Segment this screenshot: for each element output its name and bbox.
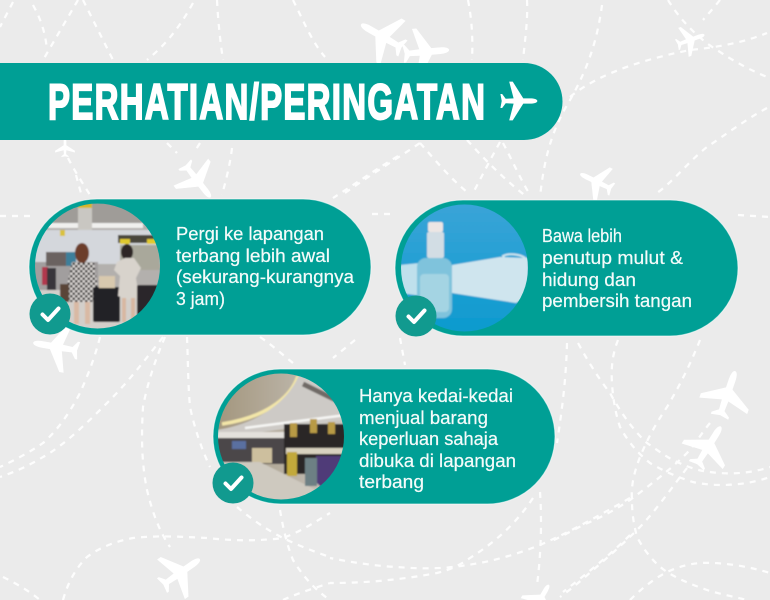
text: mask and sanitiser: hidung dan <box>542 270 636 290</box>
photo: airport shops <box>216 372 346 504</box>
title banner <box>0 63 562 140</box>
photo: travellers at airport <box>34 203 162 330</box>
plane: below banner centre <box>167 151 228 211</box>
title text: PERHATIAN/PERINGATAN <box>48 74 485 130</box>
check badge <box>212 462 254 504</box>
plane: upper centre right <box>401 26 451 78</box>
travellers <box>66 262 98 302</box>
text: essential shops only: Hanya kedai-kedai <box>359 386 513 406</box>
text: arrive early: (sekurang-kurangnya <box>176 267 355 287</box>
plane: upper centre left <box>348 2 416 70</box>
photo: mask and sanitiser <box>400 203 530 333</box>
plane: top right <box>672 20 710 59</box>
plane: left under card <box>29 319 83 375</box>
text: mask and sanitiser: Bawa lebih <box>542 226 622 246</box>
text: arrive early <box>176 224 355 309</box>
panel: arrive early <box>29 199 371 335</box>
text: arrive early: 3 jam) <box>176 289 225 309</box>
text: essential shops only: keperluan sahaja <box>359 429 499 449</box>
check badge <box>30 294 70 334</box>
plane: bottom centre <box>517 576 564 600</box>
icon: plane in banner <box>500 82 537 120</box>
text: essential shops only <box>359 386 516 492</box>
check badge <box>396 296 436 336</box>
plane: tiny below banner left <box>55 138 75 157</box>
text: arrive early: terbang lebih awal <box>176 246 330 266</box>
text: mask and sanitiser: pembersih tangan <box>542 291 692 311</box>
text: mask and sanitiser <box>542 226 692 311</box>
text: essential shops only: menjual barang <box>359 408 488 428</box>
plane: bottom left <box>148 539 214 600</box>
text: essential shops only: dibuka di lapangan <box>359 451 516 471</box>
plane: below banner right <box>572 157 620 206</box>
text: essential shops only: terbang <box>359 472 424 492</box>
panel: mask and sanitiser <box>395 200 738 336</box>
plane: right upper <box>696 363 759 425</box>
plane: right lower <box>676 414 741 478</box>
text: arrive early: Pergi ke lapangan <box>176 224 324 244</box>
text: mask and sanitiser: penutup mulut & <box>542 248 683 268</box>
panel: essential shops only <box>212 369 555 504</box>
